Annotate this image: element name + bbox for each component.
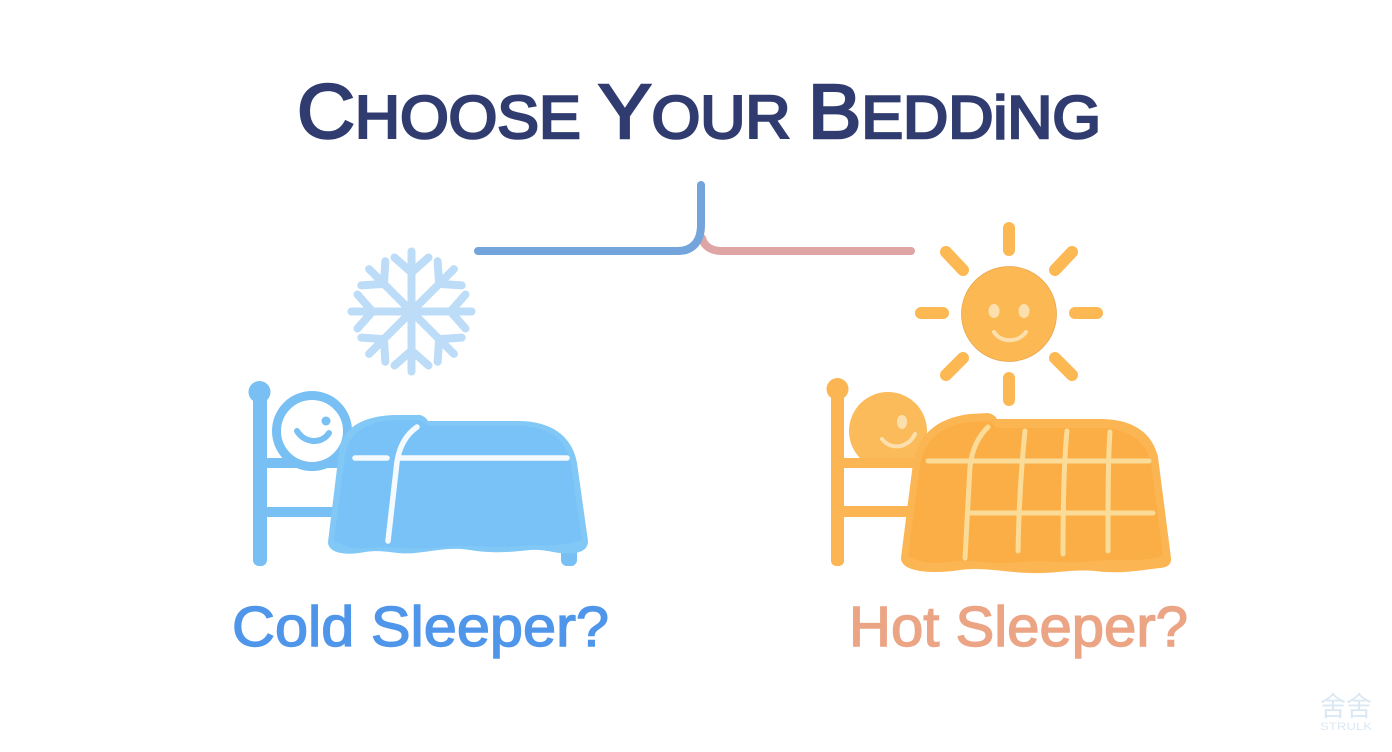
blue blanket (328, 415, 588, 554)
icon: sun (921, 228, 1097, 400)
orange quilted blanket (901, 413, 1171, 573)
branching connector (478, 185, 911, 251)
connector: cold branch (478, 185, 701, 251)
sleeper face (276, 396, 348, 466)
watermark: 舍舍 (1320, 692, 1372, 722)
sleeper face (845, 392, 927, 474)
sun face (988, 304, 1030, 340)
label: hot sleeper: Hot Sleeper? (849, 595, 1188, 659)
icon: hot sleeper in bed (826, 378, 1171, 573)
connector: hot branch (702, 238, 911, 251)
icon: snowflake (352, 252, 472, 372)
label: cold sleeper: Cold Sleeper? (232, 595, 609, 659)
icon: cold sleeper in bed (248, 381, 588, 566)
bed frame (826, 378, 920, 566)
watermark: STRULK (1320, 721, 1373, 733)
sun rays (921, 228, 1097, 400)
title: CHOOSE YOUR BEDDiNG (297, 69, 1101, 155)
bed frame (248, 381, 577, 566)
